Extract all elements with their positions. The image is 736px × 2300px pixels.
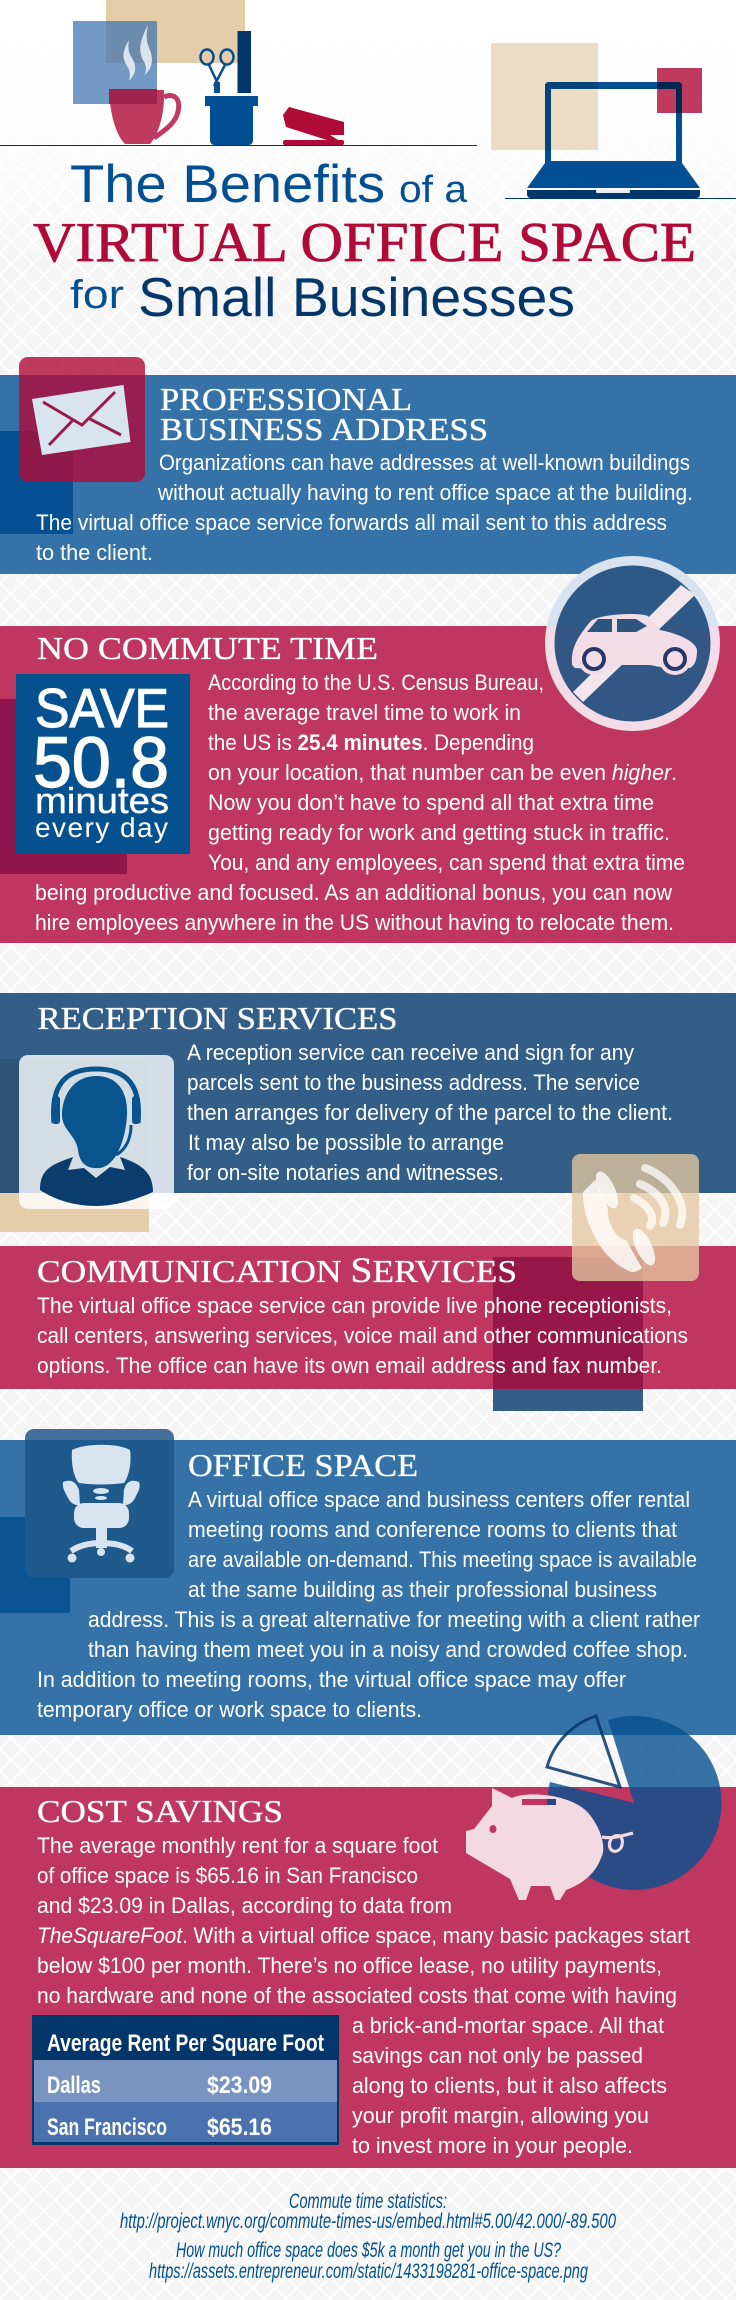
illustration: laptop [491,43,702,198]
title: for [70,273,124,317]
text block: address. This is a great alternative for meeting with a client rather [88,1607,700,1632]
title: of a [399,169,468,211]
heading: PROFESSIONAL [160,381,412,417]
illustration: desk with mug, pencil cup and stapler [73,0,344,145]
callout: save 50.8 minutes: every day [35,812,168,843]
text block: of office space is $65.16 in San Francisco [37,1863,418,1888]
text block: to invest more in your people. [352,2133,633,2158]
icon: envelope [19,357,145,482]
callout: save 50.8 minutes: SAVE [35,677,169,739]
text block: for on-site notaries and witnesses. [187,1160,504,1185]
icon: stapler [283,107,344,145]
title: Small Businesses [138,266,575,328]
text block: According to the U.S. Census Bureau, [208,670,544,695]
text block [37,1293,688,1378]
icon: mug [109,89,179,144]
heading: NO COMMUTE TIME [37,630,378,666]
callout: save 50.8 minutes [16,674,190,854]
footer: sources: Commute time statistics: [289,2190,447,2213]
icon: ruler [238,31,251,93]
heading: BUSINESS ADDRESS [160,411,488,447]
text block: Now you don’t have to spend all that extra time [208,790,654,815]
text block: your profit margin, allowing you [352,2103,649,2128]
panel: no commute time [0,626,736,943]
text block: along to clients, but it also affects [352,2073,667,2098]
icon: office chair [25,1429,174,1578]
text block [37,1833,690,2158]
text block: to the client. [36,540,153,565]
icon: no car sign [545,556,720,731]
heading: COMMUNICATION SERVICES [37,1250,517,1290]
heading [160,381,488,447]
heading: OFFICE SPACE [188,1447,418,1483]
text block [36,450,693,565]
text block: call centers, answering services, voice mail and other communications [37,1323,688,1348]
icon: piggy bank [466,1788,633,1900]
table: average rent per square foot: $23.09 [207,2072,272,2099]
table: average rent per square foot: $65.16 [207,2114,272,2141]
text block [187,1040,673,1185]
text block: no hardware and none of the associated costs that come with having [37,1983,677,2008]
text block: at the same building as their professional business [188,1577,657,1602]
text block: are available on-demand. This meeting space is available [188,1547,697,1572]
text block: The virtual office space service forwards all mail sent to this address [36,510,667,535]
text block: getting ready for work and getting stuck in traffic. [208,820,670,845]
text block [35,670,685,935]
table: average rent per square foot: San Francisco [47,2114,167,2141]
text block: a brick-and-mortar space. All that [352,2013,664,2038]
text block: Organizations can have addresses at well-known buildings [159,450,690,475]
panel: office space [0,1429,736,1735]
text block: You, and any employees, can spend that extra time [208,850,685,875]
text block: savings can not only be passed [352,2043,643,2068]
pie chart [547,1716,721,1890]
text block: without actually having to rent office space at the building. [157,480,693,505]
icon: pencil cup [205,96,258,145]
title: VIRTUAL OFFICE SPACE [33,212,696,274]
heading: COST SAVINGS [37,1793,283,1829]
text block: below $100 per month. There’s no office lease, no utility payments, [37,1953,662,1978]
text block: The average monthly rent for a square foot [37,1833,438,1858]
icon: scissors [200,50,234,93]
table: average rent per square foot: Average Rent Per Square Foot [47,2030,324,2057]
text block [37,1487,700,1722]
text block: A reception service can receive and sign for any [187,1040,634,1065]
callout: save 50.8 minutes: 50.8 [33,724,169,803]
text block: hire employees anywhere in the US without having to relocate them. [35,910,674,935]
title: The Benefits [70,155,385,214]
panel: reception services [0,993,736,1232]
text block: the average travel time to work in [208,700,521,725]
text block: TheSquareFoot. With a virtual office space, many basic packages start [37,1923,690,1948]
text block: parcels sent to the business address. The service [187,1070,640,1095]
heading: RECEPTION SERVICES [38,1000,398,1036]
callout: save 50.8 minutes: minutes [35,780,169,821]
icon: receptionist with headset [19,1055,174,1209]
table: average rent per square foot [32,2015,339,2145]
text block: The virtual office space service can provide live phone receptionists, [37,1293,672,1318]
icon: steam [123,25,152,81]
text block: meeting rooms and conference rooms to clients that [188,1517,677,1542]
icon: telephone [572,1154,699,1281]
text block: In addition to meeting rooms, the virtual office space may offer [37,1667,626,1692]
footer: sources: How much office space does $5k a month get you in the US? [176,2239,561,2262]
text block: A virtual office space and business centers offer rental [188,1487,690,1512]
footer: sources [120,2190,616,2283]
text block: and $23.09 in Dallas, according to data from [37,1893,452,1918]
panel: cost savings [0,1716,736,2168]
panel: professional business address [0,357,736,574]
table: average rent per square foot: Dallas [47,2072,101,2099]
text block: temporary office or work space to clients. [37,1697,422,1722]
panel: communication services [0,1246,736,1411]
text block: the US is 25.4 minutes. Depending [208,730,534,755]
text block: It may also be possible to arrange [188,1130,504,1155]
text block: than having them meet you in a noisy and crowded coffee shop. [88,1637,688,1662]
text block: then arranges for delivery of the parcel to the client. [187,1100,673,1125]
text block: on your location, that number can be even higher. [208,760,677,785]
text block: being productive and focused. As an additional bonus, you can now [35,880,672,905]
title [33,155,696,328]
text block: options. The office can have its own email address and fax number. [37,1353,662,1378]
